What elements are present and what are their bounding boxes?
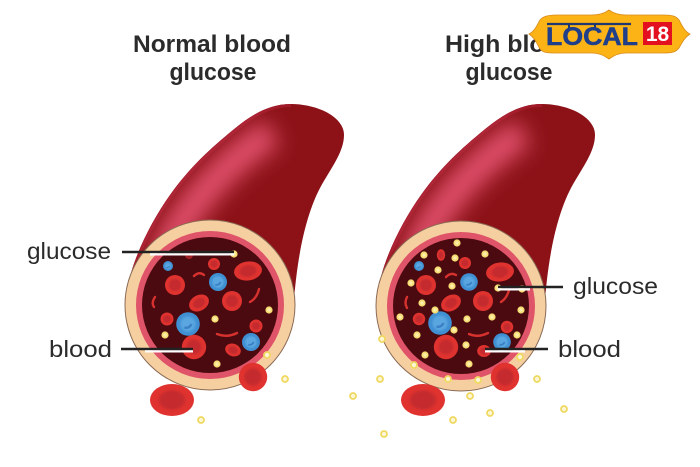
heading: high blood glucose: High blood: [445, 31, 575, 58]
escaped red blood cells: [401, 363, 519, 416]
logo: Local 18: LOCAL: [546, 23, 638, 51]
glucose particles: [161, 250, 288, 423]
white blood cells: [414, 261, 511, 351]
vessel tube: [131, 104, 344, 294]
vessel cross-section: [125, 220, 295, 390]
label: blood, high: [485, 336, 621, 362]
vessel tube: [380, 104, 595, 294]
red blood cells: [406, 249, 515, 359]
white blood cells: [163, 261, 260, 351]
label: blood, normal: blood: [49, 336, 112, 362]
heading: normal blood glucose: [133, 31, 291, 86]
label: blood, high: blood: [558, 336, 621, 362]
label: glucose, high: glucose: [573, 273, 658, 299]
red blood cells: [153, 251, 263, 359]
label: glucose, normal: glucose: [27, 238, 111, 264]
heading: normal blood glucose: Normal blood: [133, 31, 291, 58]
logo: Local 18: 18: [646, 23, 669, 46]
panel: normal blood vessel: [120, 95, 355, 423]
glucose particles: [350, 239, 567, 437]
panel: high blood vessel: [350, 95, 605, 437]
heading: high blood glucose: [445, 31, 575, 86]
heading: normal blood glucose: glucose: [170, 59, 256, 86]
heading: high blood glucose: glucose: [466, 59, 552, 86]
logo: Local 18: [529, 10, 690, 59]
vessel cross-section: [376, 221, 546, 391]
escaped red blood cells: [150, 363, 267, 416]
